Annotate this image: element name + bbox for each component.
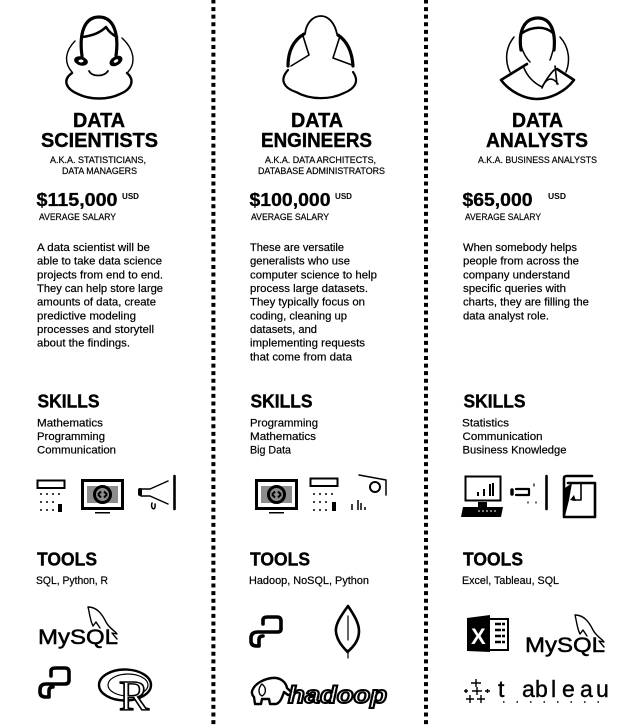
- icon: megaphone: [512, 476, 546, 509]
- text: description: amounts of data, create: [37, 297, 156, 309]
- icon: code monitor: [82, 480, 122, 514]
- list: skills: [37, 418, 116, 457]
- salary: [250, 190, 352, 223]
- list: skills: Mathematics: [250, 431, 317, 443]
- text: also known as: [50, 155, 146, 176]
- salary: USD: [548, 192, 566, 201]
- heading: data engineers: [261, 110, 372, 152]
- panel: data engineers: [249, 16, 387, 709]
- salary: USD: [122, 192, 139, 201]
- icon: data scientist portrait: [66, 17, 133, 98]
- heading: tools: TOOLS: [463, 549, 523, 570]
- salary: AVERAGE SALARY: [39, 212, 117, 223]
- text: description: processes and storytell: [37, 324, 154, 336]
- list: skills: Communication: [462, 431, 542, 443]
- icon: calculator: [38, 480, 64, 512]
- heading: data analysts: ANALYSTS: [486, 130, 588, 152]
- text: also known as: DATA MANAGERS: [62, 166, 137, 176]
- icon: computer with bar chart: [461, 476, 503, 517]
- heading: data scientists: [41, 110, 158, 152]
- text: description: predictive modeling: [37, 310, 136, 322]
- text: description: process large datasets.: [250, 283, 368, 295]
- text: tools list: SQL, Python, R: [36, 575, 108, 587]
- logo: mysql: MySQL: [525, 634, 605, 657]
- text: description: specific queries with: [463, 283, 566, 295]
- text: description: that come from data: [250, 352, 353, 364]
- list: skills: [462, 418, 566, 457]
- list: skills: Business Knowledge: [462, 445, 566, 457]
- logo: mysql: [525, 615, 605, 657]
- logo: excel: [467, 615, 508, 652]
- text: description: They typically focus on: [250, 297, 365, 309]
- salary: AVERAGE SALARY: [465, 212, 542, 223]
- text: description: data analyst role.: [463, 310, 549, 322]
- logo: mysql: MySQL: [38, 626, 118, 649]
- logo: hadoop: hadoop: [288, 682, 387, 709]
- list: skills: Programming: [250, 418, 318, 430]
- heading: data scientists: DATA: [73, 110, 125, 132]
- heading: data engineers: DATA: [291, 110, 343, 132]
- list: skills: Statistics: [462, 418, 510, 430]
- text: tools list: Hadoop, NoSQL, Python: [249, 575, 369, 587]
- heading: tools: TOOLS: [250, 549, 310, 570]
- salary: $65,000: [462, 190, 532, 210]
- text: description: charts, they are filling the: [463, 297, 589, 309]
- text: description: [250, 242, 377, 364]
- logo: tableau: tableau: [498, 676, 609, 702]
- text: description: datasets, and: [250, 324, 317, 336]
- logo: mysql: [38, 607, 118, 649]
- salary: AVERAGE SALARY: [251, 212, 330, 223]
- list: skills: Mathematics: [37, 418, 104, 430]
- list: skills: Programming: [37, 431, 105, 443]
- text: description: generalists who use: [250, 256, 350, 268]
- text: tools list: Excel, Tableau, SQL: [462, 575, 559, 587]
- heading: skills: SKILLS: [38, 391, 100, 412]
- salary: $100,000: [250, 190, 330, 210]
- logo: python: [251, 617, 281, 646]
- logo: python: [40, 668, 69, 697]
- text: description: implementing requests: [250, 338, 366, 350]
- heading: tools: TOOLS: [37, 549, 97, 570]
- list: skills: Big Data: [250, 445, 292, 457]
- text: also known as: A.K.A. STATISTICIANS,: [50, 155, 146, 165]
- text: description: A data scientist will be: [37, 242, 150, 254]
- logo: hadoop: [252, 678, 387, 709]
- text: description: about the findings.: [37, 338, 130, 350]
- text: description: These are versatile: [250, 242, 344, 254]
- text: also known as: [258, 155, 385, 176]
- text: description: coding, cleaning up: [250, 310, 347, 322]
- icon: megaphone: [140, 476, 174, 509]
- heading: data analysts: [486, 110, 588, 152]
- logo: excel: X: [471, 624, 486, 649]
- salary: USD: [335, 192, 352, 201]
- heading: data scientists: SCIENTISTS: [41, 130, 158, 152]
- text: description: people from across the: [463, 256, 579, 268]
- heading: data analysts: DATA: [512, 110, 563, 132]
- panel: data analysts: [461, 18, 609, 703]
- salary: [462, 190, 566, 223]
- text: also known as: A.K.A. DATA ARCHITECTS,: [265, 155, 376, 165]
- text: description: able to take data science: [37, 256, 162, 268]
- text: description: [463, 242, 589, 322]
- heading: skills: SKILLS: [250, 391, 312, 412]
- logo: r language: [99, 670, 151, 720]
- panel: data scientists: [36, 17, 174, 720]
- list: skills: [250, 418, 318, 457]
- text: description: projects from end to end.: [37, 269, 163, 281]
- text: also known as: DATABASE ADMINISTRATORS: [258, 166, 385, 176]
- salary: $115,000: [36, 190, 118, 210]
- icon: code monitor: [256, 480, 296, 514]
- icon: book: [564, 476, 595, 517]
- icon: analytics chart and gauge: [352, 475, 386, 510]
- icon: data analyst portrait: [501, 18, 574, 99]
- text: description: company understand: [463, 269, 570, 281]
- list: skills: Communication: [37, 445, 116, 457]
- salary: [36, 190, 139, 223]
- icon: calculator: [310, 478, 338, 511]
- text: also known as: A.K.A. BUSINESS ANALYSTS: [478, 155, 597, 165]
- logo: r language: R: [119, 674, 149, 720]
- text: description: They can help store large: [37, 283, 163, 295]
- heading: data engineers: ENGINEERS: [261, 130, 372, 152]
- logo: mongodb leaf: [336, 606, 359, 658]
- text: description: [37, 242, 163, 350]
- text: description: When somebody helps: [463, 242, 577, 254]
- text: description: computer science to help: [250, 269, 377, 281]
- icon: data engineer portrait: [283, 16, 356, 98]
- heading: skills: SKILLS: [464, 391, 526, 412]
